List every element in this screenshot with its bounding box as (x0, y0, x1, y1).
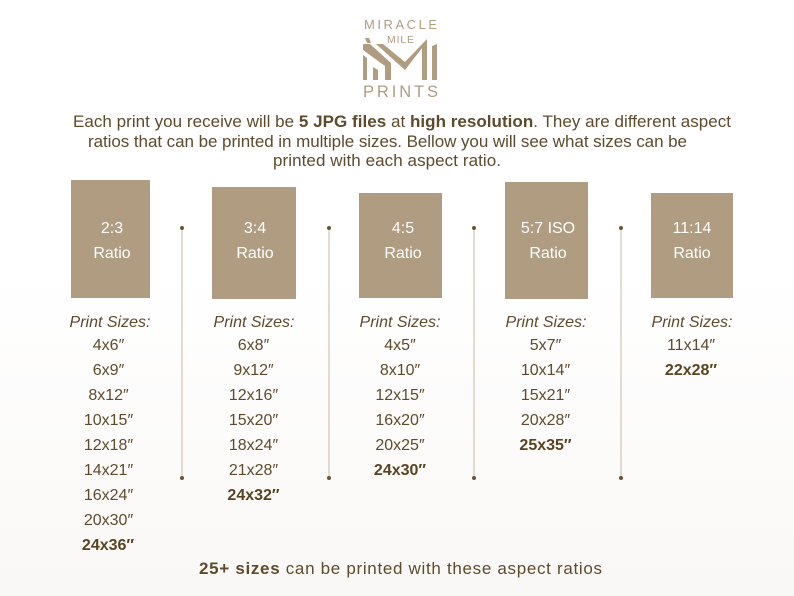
sizes column 5:7: 5x7″ (530, 337, 562, 354)
sizes column 2:3: 10x15″ (84, 412, 133, 429)
sizes column 3:4: 9x12″ (233, 362, 274, 379)
sizes column 2:3: 20x30″ (84, 512, 133, 529)
ratio box: 11:14: Ratio (673, 245, 711, 262)
sizes column 5:7 (506, 314, 586, 454)
intro text: ratios that can be printed in multiple sizes. Bellow you will see what sizes can be (88, 132, 687, 151)
sizes column 2:3: 16x24″ (84, 487, 133, 504)
sizes column 4:5: 24x30″ (374, 462, 426, 479)
sizes column 4:5: 4x5″ (384, 337, 416, 354)
ratio box: 11:14: 11:14 (673, 220, 712, 237)
sizes column 5:7: 15x21″ (521, 387, 570, 404)
sizes column 2:3: 24x36″ (82, 537, 134, 554)
logo: PRINTS (363, 83, 438, 101)
sizes column 4:5 (360, 314, 440, 479)
sizes column 2:3: 14x21″ (84, 462, 133, 479)
sizes column 3:4: 6x8″ (238, 337, 270, 354)
sizes column 4:5: 20x25″ (375, 437, 425, 454)
ratio box: 2:3 (71, 180, 150, 298)
sizes column 2:3 (70, 314, 150, 554)
ratio box: 3:4: Ratio (236, 245, 274, 262)
ratio box: 4:5: 4:5 (392, 220, 414, 237)
sizes column 3:4: Print Sizes: (214, 314, 294, 331)
ratio box: 4:5: Ratio (384, 245, 422, 262)
footer note: 25+ sizes can be printed with these aspect ratios (199, 559, 602, 578)
divider 3 (472, 226, 476, 480)
sizes column 4:5: 16x20″ (375, 412, 425, 429)
intro text (73, 112, 731, 170)
sizes column 3:4: 24x32″ (227, 487, 280, 504)
ratio box: 4:5 (359, 193, 442, 298)
ratio box: 5:7 ISO: 5:7 ISO (521, 220, 575, 237)
sizes column 3:4: 12x16″ (229, 387, 278, 404)
sizes column 2:3: 4x6″ (93, 337, 125, 354)
sizes column 3:4 (214, 314, 294, 504)
sizes column 11:14 (652, 314, 732, 379)
sizes column 5:7: Print Sizes: (506, 314, 586, 331)
intro text: printed with each aspect ratio. (273, 151, 501, 170)
sizes column 2:3: 12x18″ (84, 437, 133, 454)
sizes column 5:7: 20x28″ (521, 412, 570, 429)
ratio box: 2:3: Ratio (93, 245, 131, 262)
logo (363, 17, 438, 101)
ratio box: 3:4: 3:4 (244, 220, 266, 237)
sizes column 2:3: Print Sizes: (70, 314, 150, 331)
divider 1 (180, 226, 184, 480)
divider 2 (327, 226, 331, 480)
ratio box: 5:7 ISO: Ratio (529, 245, 567, 262)
sizes column 11:14: 22x28″ (665, 362, 717, 379)
sizes column 11:14: 11x14″ (667, 337, 715, 354)
logo: MILE (387, 34, 414, 46)
ratio box: 5:7 ISO (505, 182, 588, 299)
ratio box: 11:14 (651, 193, 733, 298)
divider 4 (619, 226, 623, 480)
sizes column 5:7: 25x35″ (519, 437, 572, 454)
sizes column 3:4: 15x20″ (229, 412, 278, 429)
sizes column 3:4: 21x28″ (229, 462, 278, 479)
sizes column 4:5: Print Sizes: (360, 314, 440, 331)
sizes column 11:14: Print Sizes: (652, 314, 732, 331)
sizes column 2:3: 8x12″ (88, 387, 129, 404)
intro text: Each print you receive will be 5 JPG files at high resolution. They are different aspect (73, 112, 731, 131)
ratio box: 3:4 (212, 187, 296, 299)
sizes column 3:4: 18x24″ (229, 437, 278, 454)
logo: MIRACLE (364, 17, 437, 32)
sizes column 5:7: 10x14″ (521, 362, 570, 379)
sizes column 2:3: 6x9″ (93, 362, 125, 379)
ratio box: 2:3: 2:3 (101, 220, 123, 237)
sizes column 4:5: 8x10″ (380, 362, 421, 379)
sizes column 4:5: 12x15″ (375, 387, 425, 404)
